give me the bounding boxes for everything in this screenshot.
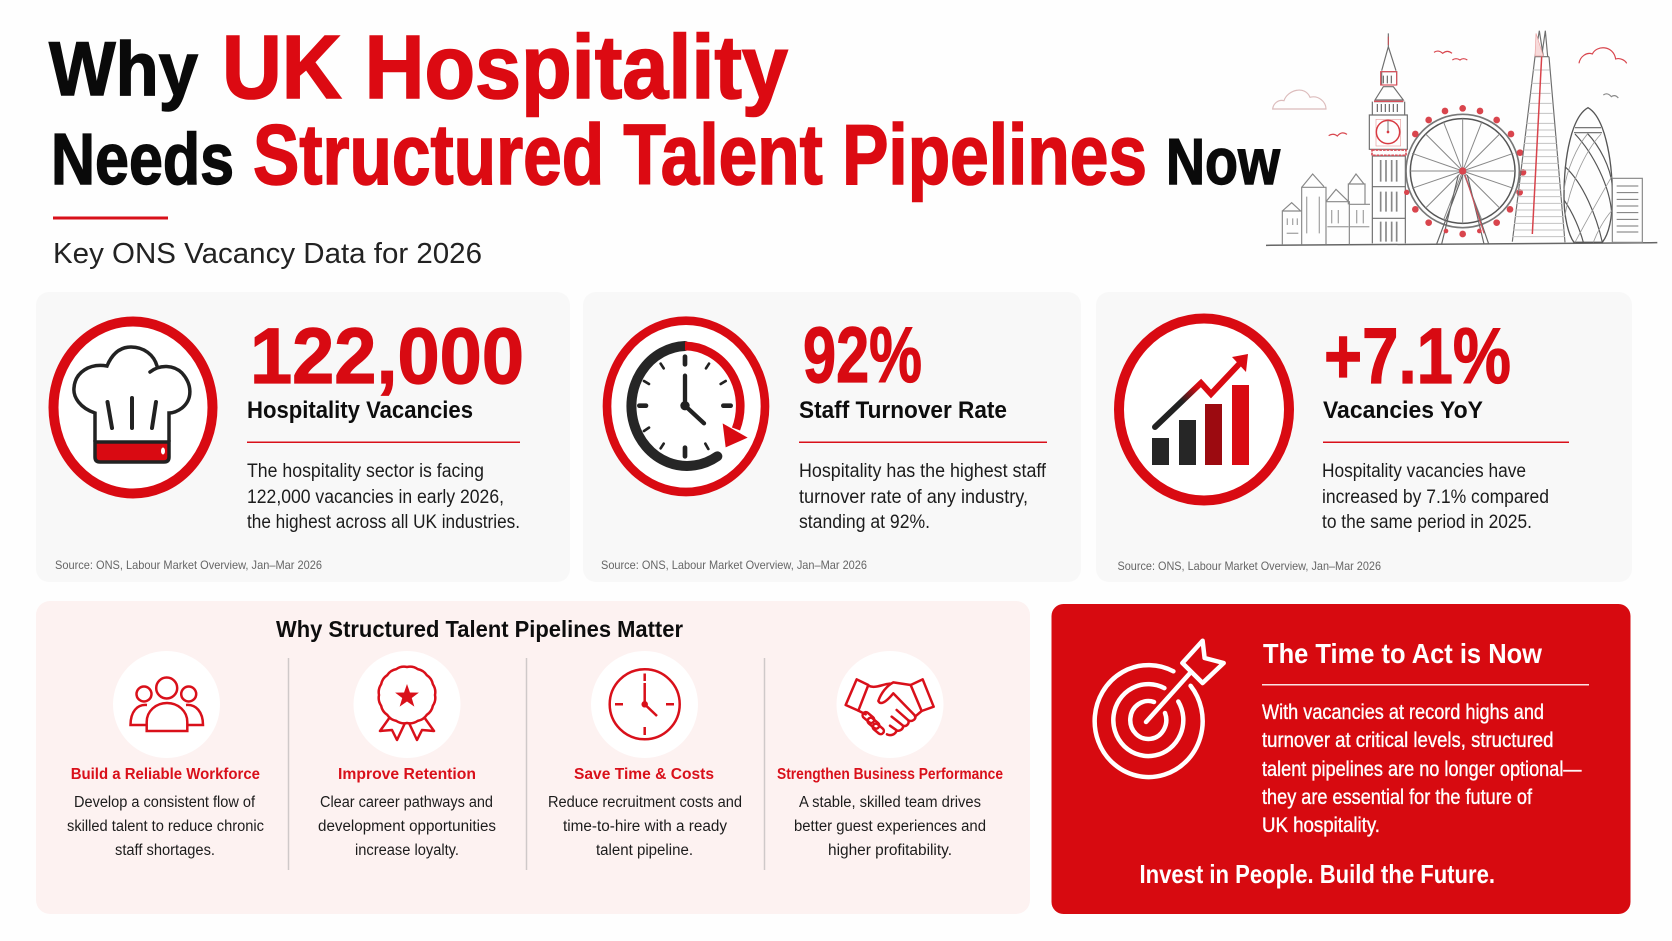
panel: turnover stat card [583, 292, 1081, 582]
benefit: business performance [777, 651, 1003, 859]
benefit: save time and costs [548, 651, 742, 859]
panel: year on year stat card [1096, 292, 1632, 582]
description: they are essential for the future of [1262, 786, 1532, 809]
benefit: save time and costs: time-to-hire with a ready [563, 818, 727, 835]
description [247, 461, 520, 533]
description: Hospitality vacancies have [1322, 461, 1526, 482]
benefit: save time and costs: talent pipeline. [596, 842, 693, 859]
source: Source: ONS, Labour Market Overview, Jan–Mar 2026 [55, 558, 322, 572]
benefit: business performance: Strengthen Business Performance [777, 766, 1003, 783]
icon: target with arrow [1095, 641, 1224, 777]
benefit: save time and costs: Save Time & Costs [574, 766, 714, 783]
benefit: business performance: A stable, skilled team drives [799, 794, 981, 811]
source: Source: ONS, Labour Market Overview, Jan–Mar 2026 [601, 558, 867, 572]
benefit: reliable workforce: Develop a consistent flow of [74, 794, 256, 811]
label: staff turnover rate: Staff Turnover Rate [799, 397, 1007, 424]
source: Source: ONS, Labour Market Overview, Jan–Mar 2026 [1118, 559, 1381, 573]
description: to the same period in 2025. [1322, 512, 1532, 533]
icon: handshake [846, 679, 934, 735]
description: turnover rate of any industry, [799, 487, 1028, 508]
icon: chef hat [54, 322, 212, 494]
subtitle: Key ONS Vacancy Data for 2026 [53, 238, 482, 270]
panel: vacancies stat card [36, 292, 570, 582]
description: With vacancies at record highs and [1262, 701, 1544, 724]
icon: rising bar chart [1119, 318, 1289, 500]
description: increased by 7.1% compared [1322, 487, 1549, 508]
panel: call to action [1052, 604, 1630, 914]
benefit: reliable workforce: staff shortages. [115, 842, 215, 859]
title [49, 18, 1280, 203]
label: hospitality vacancies: Hospitality Vacancies [247, 397, 473, 424]
benefit: improve retention: Clear career pathways and [320, 794, 493, 811]
description [1262, 701, 1582, 837]
benefit: reliable workforce: Build a Reliable Workforce [71, 766, 260, 783]
description: 122,000 vacancies in early 2026, [247, 487, 504, 508]
tagline: Invest in People. Build the Future. [1140, 859, 1495, 889]
description [1322, 461, 1549, 533]
benefit: save time and costs: Reduce recruitment costs and [548, 794, 742, 811]
description: talent pipelines are no longer optional— [1262, 758, 1582, 781]
icon: clock with arrow [607, 321, 765, 492]
title: Structured Talent Pipelines [253, 108, 1147, 203]
description [799, 461, 1047, 533]
benefit: business performance: better guest experiences and [794, 818, 986, 835]
statistic: +7.1%: +7.1% [1324, 311, 1511, 400]
icon: team [130, 678, 203, 731]
benefit: improve retention: development opportunities [318, 818, 496, 835]
icon: award rosette [379, 667, 435, 740]
panel: why pipelines matter [36, 601, 1030, 914]
illustration: London skyline [1266, 31, 1657, 245]
description: The hospitality sector is facing [247, 461, 484, 482]
benefit: improve retention [318, 651, 496, 859]
benefit: improve retention: increase loyalty. [355, 842, 459, 859]
title: Why [49, 27, 198, 112]
heading: The Time to Act is Now [1263, 638, 1542, 669]
title: Now [1166, 125, 1280, 198]
title: UK Hospitality [222, 18, 788, 118]
description: standing at 92%. [799, 512, 930, 533]
icon: clock [610, 669, 680, 739]
benefit: reliable workforce [67, 651, 264, 859]
benefit: reliable workforce: skilled talent to reduce chronic [67, 818, 264, 835]
benefit: business performance: higher profitability. [828, 842, 952, 859]
section heading: Why Structured Talent Pipelines Matter [276, 616, 683, 642]
label: vacancies yoy: Vacancies YoY [1323, 397, 1483, 424]
benefit: improve retention: Improve Retention [338, 766, 476, 783]
description: the highest across all UK industries. [247, 512, 520, 533]
statistic: 92%: 92% [803, 310, 922, 399]
description: UK hospitality. [1262, 814, 1380, 837]
statistic: 122,000: 122,000 [250, 311, 524, 400]
description: Hospitality has the highest staff [799, 461, 1047, 482]
description: turnover at critical levels, structured [1262, 729, 1554, 752]
title: Needs [51, 120, 234, 200]
